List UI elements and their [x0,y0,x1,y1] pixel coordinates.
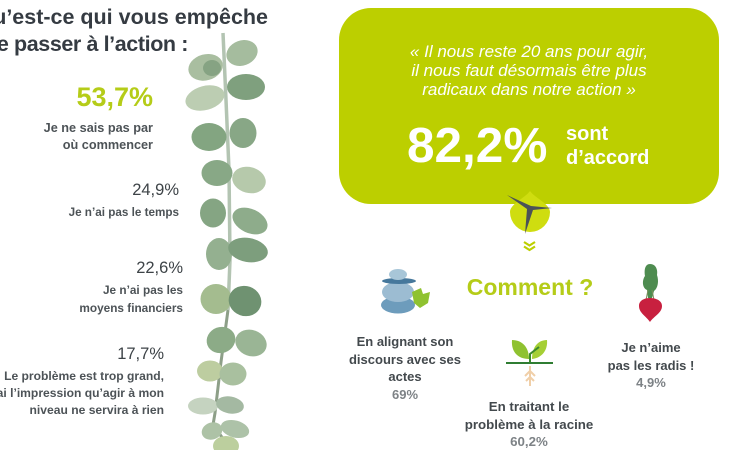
heading: comment: Comment ? [467,274,593,300]
text: radis: pas les radis ! [608,358,694,372]
stat: 22,6% [79,259,183,315]
big percentage: 82,2% [407,118,547,173]
stat: 24,9% [68,181,179,219]
text: radis: 4,9% [636,375,666,390]
stat: 17,7% [0,345,164,417]
stat: 17,7%: niveau ne servira à rien [30,403,164,417]
stat: 53,7%: où commencer [63,138,153,152]
title [0,5,268,56]
quote text: il nous faut désormais être plus [411,61,647,80]
stat: 53,7% [44,82,153,152]
text: racine: 60,2% [510,434,548,449]
icon: sprout with roots [506,340,553,386]
quote text: « Il nous reste 20 ans pour agir, [410,42,648,61]
text: discours [349,334,461,402]
icon: down chevrons [524,241,536,252]
stat: 24,9%: Je n’ai pas le temps [69,206,179,219]
stat: 22,6%: moyens financiers [79,301,183,315]
text: discours: discours avec ses [349,352,461,366]
text: racine: problème à la racine [465,416,593,432]
stat: 53,7%: 53,7% [76,82,153,112]
stat: 22,6%: Je n’ai pas les [103,283,183,297]
stat: 53,7%: Je ne sais pas par [44,121,153,135]
quote text [410,42,648,99]
text: racine [465,399,593,449]
agreement label: sont [566,123,608,145]
agreement label: d’accord [566,146,649,168]
text: radis [608,340,694,390]
stat: 17,7%: 17,7% [117,345,164,363]
text: discours: En alignant son [357,334,453,349]
icon: radish [639,264,662,322]
stat: 17,7%: Le problème est trop grand, [4,369,164,383]
quote text: radicaux dans notre action » [422,80,636,99]
text: discours: actes [388,369,422,384]
text: radis: Je n’aime [621,340,681,355]
stat: 22,6%: 22,6% [136,259,183,277]
icon: clock drop [507,192,552,234]
text: discours: 69% [392,386,418,402]
icon: stacked stones [381,269,430,314]
panel: quote [339,8,719,204]
stat: 24,9%: 24,9% [132,181,179,199]
text: racine: En traitant le [489,399,569,414]
agreement label [566,123,649,168]
